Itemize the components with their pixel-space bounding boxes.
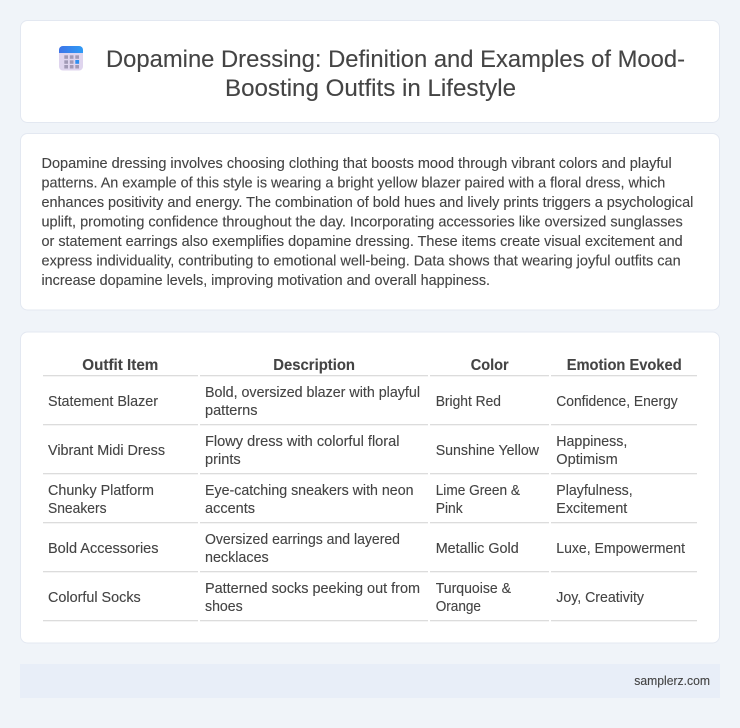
table row: colorful socks: Turquoise & — [436, 581, 511, 597]
text block: description paragraph: uplift, promoting confidence throughout the day. Incorporating accessories like oversized sunglasses — [42, 214, 683, 230]
table row: bold accessories: Metallic Gold — [436, 541, 519, 557]
table row: bold accessories: Luxe, Empowerment — [556, 541, 685, 557]
table row: bold accessories — [43, 532, 697, 572]
panel: title header — [20, 20, 720, 122]
table row: statement blazer: Bright Red — [436, 394, 501, 410]
table row: statement blazer: Statement Blazer — [48, 394, 158, 410]
table row: chunky platform sneakers — [43, 483, 697, 523]
table header row: Color — [471, 357, 509, 374]
table row: vibrant midi dress: prints — [205, 452, 241, 468]
table row: colorful socks — [43, 581, 697, 621]
table row: chunky platform sneakers: Pink — [436, 501, 463, 517]
table row: colorful socks: Colorful Socks — [48, 590, 141, 606]
footer — [20, 664, 720, 698]
title — [106, 46, 685, 102]
table row: bold accessories: Bold Accessories — [48, 541, 158, 557]
table row: statement blazer: patterns — [205, 403, 258, 419]
table row: vibrant midi dress — [43, 434, 697, 474]
panel: outfit table — [20, 332, 720, 643]
table header row: Outfit Item — [82, 357, 158, 374]
table row: colorful socks: Joy, Creativity — [556, 590, 645, 606]
table row: statement blazer — [43, 385, 697, 425]
table row: chunky platform sneakers: Eye-catching sneakers with neon — [205, 483, 414, 499]
title: Dopamine Dressing: Definition and Examples of Mood- — [106, 46, 685, 73]
text block: description paragraph: express individuality, contributing to emotional well-being. Data shows that wearing joyful outfits can — [42, 254, 681, 270]
footer: samplerz.com — [634, 674, 710, 688]
text block: description paragraph — [42, 156, 693, 289]
table header row — [43, 357, 697, 376]
table header row: Emotion Evoked — [567, 357, 682, 374]
table row: colorful socks: shoes — [205, 599, 243, 615]
text block: description paragraph: patterns. An example of this style is wearing a bright yellow blazer paired with a floral dress, which — [42, 176, 665, 192]
table row: chunky platform sneakers: Sneakers — [48, 501, 106, 517]
table row: vibrant midi dress: Sunshine Yellow — [436, 443, 540, 459]
title: Boosting Outfits in Lifestyle — [225, 75, 516, 102]
text block: description paragraph: Dopamine dressing involves choosing clothing that boosts mood through vibrant colors and playful — [42, 156, 672, 172]
table row: vibrant midi dress: Flowy dress with colorful floral — [205, 434, 400, 450]
table row: chunky platform sneakers: accents — [205, 501, 255, 517]
text block: description paragraph: enhances positivity and energy. The combination of bold hues and lively prints triggers a psychological — [42, 195, 693, 211]
table row: statement blazer: Confidence, Energy — [556, 394, 678, 410]
text block: description paragraph: or statement earrings also exemplifies dopamine dressing. These items create visual excitement and — [42, 234, 683, 250]
table row: vibrant midi dress: Vibrant Midi Dress — [48, 443, 165, 459]
panel: description — [20, 134, 720, 310]
table row: chunky platform sneakers: Excitement — [556, 501, 627, 517]
table row: colorful socks: Patterned socks peeking out from — [205, 581, 420, 597]
table header row: Description — [273, 357, 355, 374]
table row: vibrant midi dress: Optimism — [556, 452, 618, 468]
table row: statement blazer: Bold, oversized blazer with playful — [205, 385, 420, 401]
table row: bold accessories: Oversized earrings and layered — [205, 532, 400, 548]
table row: chunky platform sneakers: Chunky Platform — [48, 483, 154, 499]
table row: vibrant midi dress: Happiness, — [556, 434, 627, 450]
table row: chunky platform sneakers: Playfulness, — [556, 483, 633, 499]
table row: chunky platform sneakers: Lime Green & — [436, 483, 520, 499]
table row: colorful socks: Orange — [436, 599, 481, 615]
text block: description paragraph: increase dopamine levels, improving motivation and overall happiness. — [42, 273, 490, 289]
table row: bold accessories: necklaces — [205, 550, 269, 566]
icon: calendar — [59, 46, 83, 70]
